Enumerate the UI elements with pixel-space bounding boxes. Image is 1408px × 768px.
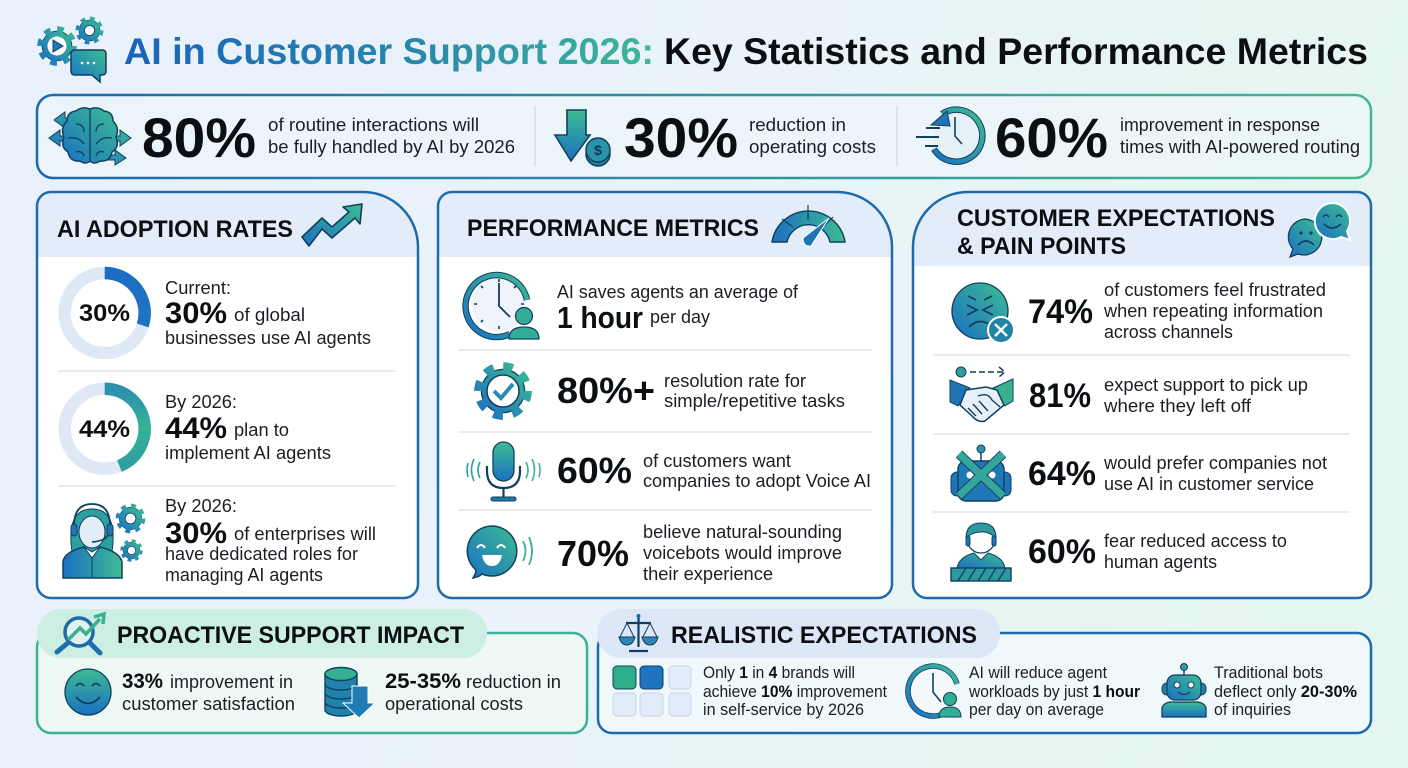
stat: 64%: 64% — [1028, 455, 1096, 493]
icon: rising arrow — [302, 204, 362, 246]
text: 74% description: of customers feel frustrated — [1104, 279, 1326, 300]
text: current adoption: 30% — [165, 297, 227, 330]
text: 81% description — [1103, 374, 1308, 416]
icon: magnifier with trend arrow — [57, 614, 104, 653]
text: dedicated roles — [165, 495, 376, 585]
text: 2026 plans — [165, 391, 331, 463]
icon: gauge — [772, 205, 845, 246]
chart: donut 44%: 44% — [79, 416, 130, 443]
icon: smiling speech bubble — [467, 526, 532, 578]
heading: PROACTIVE SUPPORT IMPACT — [117, 622, 464, 649]
text: traditional bots: deflect only 20-30% — [1214, 682, 1357, 701]
icon: cost arrow with coin: $ — [594, 142, 602, 158]
text: voice AI: of customers want — [643, 450, 791, 471]
icon: robot — [1162, 664, 1206, 717]
text: resolution rate: resolution rate for — [664, 370, 806, 391]
text: 64% description: use AI in customer service — [1104, 473, 1314, 494]
panel: performance metrics — [438, 192, 892, 598]
text: dedicated roles: By 2026: — [165, 495, 237, 516]
stat: 74%: 74% — [1028, 293, 1093, 331]
text: voicebots: voicebots would improve — [643, 542, 842, 563]
text: voicebots: their experience — [643, 563, 773, 584]
text: 80% description — [268, 114, 515, 157]
stat: 60%: 60% — [995, 106, 1108, 169]
text: 64% description — [1103, 452, 1327, 494]
text: 80% description: of routine interactions will — [268, 114, 479, 135]
heading: AI ADOPTION RATES — [57, 216, 293, 243]
icon: robot crossed out — [951, 445, 1011, 501]
text: 2026 plans: 44% — [165, 412, 227, 445]
text: dedicated roles: of enterprises will — [234, 523, 376, 544]
text: 74% description: when repeating information — [1103, 300, 1323, 321]
text: dedicated roles: have dedicated roles for — [165, 543, 358, 564]
text: workload: AI will reduce agent — [969, 663, 1107, 682]
icon: gear with check — [478, 366, 528, 416]
text: 2026 plans: plan to — [234, 419, 289, 440]
text: satisfaction: customer satisfaction — [122, 693, 295, 714]
text: 60% description: fear reduced access to — [1104, 530, 1287, 551]
title — [124, 31, 1368, 72]
text: operational costs: reduction in — [466, 671, 561, 692]
text: dedicated roles: managing AI agents — [165, 564, 323, 585]
text: 64% description: would prefer companies not — [1103, 452, 1327, 473]
stat: 81%: 81% — [1029, 377, 1091, 415]
icon: balance scales — [619, 614, 658, 651]
text: hours saved: 1 hour — [557, 300, 643, 335]
text: workload: workloads by just 1 hour — [968, 682, 1140, 701]
text: 60% description: improvement in response — [1120, 114, 1320, 135]
text: satisfaction: improvement in — [170, 671, 293, 692]
heading: & PAIN POINTS — [957, 233, 1126, 260]
text: 30% description: operating costs — [749, 136, 876, 157]
text: operational costs: operational costs — [385, 693, 523, 714]
panel: customer expectations and pain points — [913, 192, 1371, 598]
text: 81% description: expect support to pick up — [1104, 374, 1308, 395]
panel: AI adoption rates — [37, 192, 418, 598]
icon: cost arrow with coin — [555, 110, 610, 166]
text: 74% description — [1103, 279, 1326, 342]
text: 74% description: across channels — [1104, 321, 1233, 342]
text: 2026 plans: By 2026: — [165, 391, 237, 412]
text: 60% description: human agents — [1104, 551, 1217, 572]
text: 30% description — [749, 114, 876, 157]
text: 60% description: times with AI-powered routing — [1120, 136, 1360, 157]
heading pill — [37, 609, 487, 658]
icon: fast clock — [916, 110, 982, 162]
text: traditional bots: Traditional bots — [1214, 663, 1323, 682]
text: current adoption — [165, 277, 371, 348]
panel: headline stats — [37, 95, 1371, 178]
icon: clock with person — [466, 275, 539, 339]
text: current adoption: of global — [234, 304, 305, 325]
text: 30% description: reduction in — [749, 114, 846, 135]
text: 60% description — [1104, 530, 1287, 572]
stat: 30%: 30% — [624, 106, 738, 169]
panel: proactive support impact — [37, 609, 587, 733]
icon: handshake with progress arrow — [950, 367, 1013, 421]
text: current adoption: Current: — [165, 277, 231, 298]
text: traditional bots: of inquiries — [1214, 700, 1291, 719]
chart: donut 30%: 30% — [79, 300, 130, 327]
text: one in four brands: Only 1 in 4 brands will — [703, 663, 855, 682]
icon: smiley — [65, 669, 111, 715]
panel: realistic expectations — [597, 609, 1371, 733]
icon: sad and happy bubbles — [1288, 203, 1350, 257]
icon: one in four grid — [613, 666, 691, 716]
text: traditional bots — [1214, 663, 1357, 719]
text: one in four brands: in self-service by 2026 — [703, 700, 864, 719]
heading pill — [597, 609, 1000, 658]
text: one in four brands: achieve 10% improvement — [703, 682, 887, 701]
icon: clock with person — [908, 666, 961, 717]
stat: 60% agents: 60% — [1028, 533, 1096, 571]
text: workload — [968, 663, 1140, 719]
text: 2026 plans: implement AI agents — [165, 442, 331, 463]
title: Key Statistics and Performance Metrics — [664, 31, 1368, 72]
heading: REALISTIC EXPECTATIONS — [671, 622, 977, 649]
text: operational costs: 25-35% — [385, 670, 461, 693]
text: satisfaction — [122, 670, 295, 714]
heading: CUSTOMER EXPECTATIONS — [957, 205, 1275, 232]
icon: microphone — [467, 442, 540, 501]
text: one in four brands — [703, 663, 887, 719]
chart: donut 30% — [65, 273, 145, 353]
icon: human agent at desk — [951, 523, 1011, 581]
text: operational costs — [385, 670, 561, 714]
text: current adoption: businesses use AI agents — [165, 327, 371, 348]
text: voice AI: companies to adopt Voice AI — [643, 470, 871, 491]
icon: support agent with gears — [63, 504, 143, 578]
text: voicebots: believe natural-sounding — [643, 521, 842, 542]
stat: 70%: 70% — [557, 533, 629, 574]
stat: 80%+: 80%+ — [557, 370, 655, 411]
text: 81% description: where they left off — [1103, 395, 1252, 416]
heading: PERFORMANCE METRICS — [467, 215, 759, 242]
text: hours saved — [557, 281, 799, 335]
text: 80% description: be fully handled by AI by 2026 — [268, 136, 515, 157]
stat: 80%: 80% — [142, 106, 256, 169]
text: dedicated roles: 30% — [165, 517, 227, 550]
text: satisfaction: 33% — [122, 670, 163, 693]
text: voicebots — [643, 521, 842, 584]
title: AI in Customer Support 2026: — [124, 31, 654, 72]
chart: donut 44% — [65, 389, 145, 469]
text: resolution rate: simple/repetitive tasks — [664, 390, 845, 411]
text: 60% description — [1120, 114, 1360, 157]
text: resolution rate — [664, 370, 845, 411]
icon: gears and chat logo — [40, 18, 106, 82]
text: voice AI — [643, 450, 871, 491]
text: hours saved: per day — [650, 306, 711, 327]
icon: frustrated face — [952, 283, 1014, 343]
heading — [957, 205, 1275, 260]
stat: 60% customers: 60% — [557, 450, 632, 491]
text: workload: per day on average — [969, 700, 1104, 719]
text: hours saved: AI saves agents an average of — [557, 281, 799, 302]
icon: brain with arrows — [49, 108, 131, 165]
icon: database with down arrow — [325, 668, 375, 718]
